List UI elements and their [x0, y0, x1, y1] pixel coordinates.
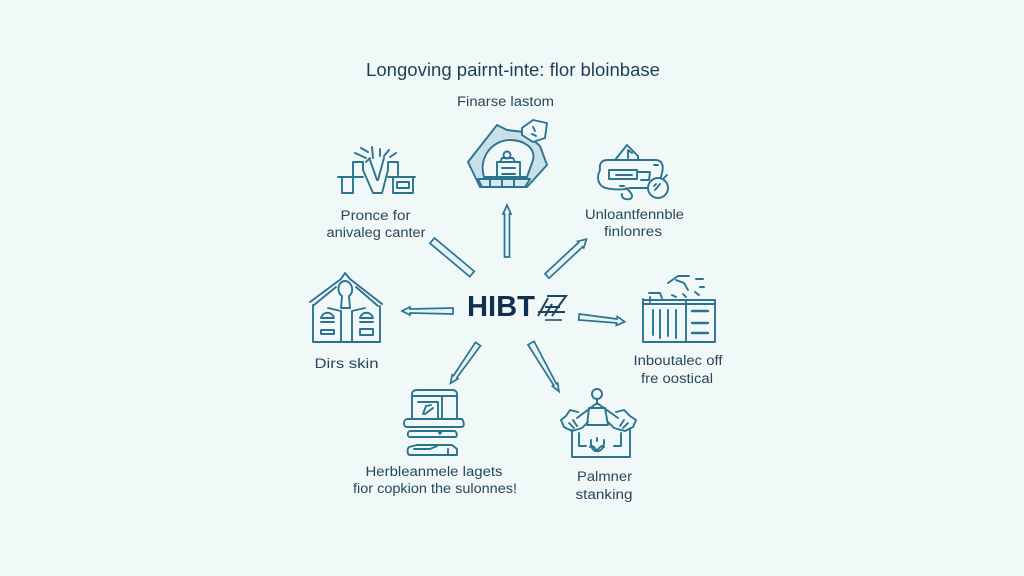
label: Unloantfennble finlonres [585, 207, 684, 239]
arrow: to lower right [528, 341, 562, 393]
node: Finarse lastom [457, 94, 554, 187]
label: Inboutalec off fre oostical: Inboutalec off [634, 353, 723, 368]
icon: laptop and books [404, 390, 464, 455]
label: Pronce for anivaleg canter [326, 208, 426, 240]
label: Herbleanmele lagets for copkion the sulonnes!: fior copkion the sulonnes! [353, 481, 517, 496]
node: Palmner stanking [561, 389, 636, 502]
label: Dirs skin: Dirs skin [314, 356, 378, 371]
icon: device with stopwatch [598, 145, 668, 199]
arrow: up to Finarse lastom [503, 205, 511, 257]
arrow: to lower left [448, 342, 481, 385]
node: Unloantfennble finlonres [585, 145, 684, 239]
node: Pronce for anivaleg canter [326, 147, 426, 240]
icon: temple with trees [561, 389, 636, 457]
icon: tree with buildings [338, 147, 415, 193]
label: Inboutalec off fre oostical: fre oostical [641, 371, 713, 386]
label: Finarse lastom: Finarse lastom [457, 94, 554, 109]
node: Dirs skin [310, 273, 382, 371]
label: Herbleanmele lagets for copkion the sulonnes! [353, 464, 517, 496]
node: Inboutalec off fre oostical [634, 276, 723, 386]
node: Herbleanmele lagets for copkion the sulonnes! [353, 390, 517, 496]
label: Unloantfennble finlonres: Unloantfennble [585, 207, 684, 222]
label: Pronce for anivaleg canter: Pronce for [340, 208, 411, 223]
title: Longoving pairnt-inte: flor bloinbase [366, 60, 660, 80]
icon: finance building [468, 120, 547, 187]
icon: house with keyhole [310, 273, 382, 342]
arrow: to right [579, 313, 625, 326]
icon: document board with scattered marks [643, 276, 715, 342]
label: Herbleanmele lagets for copkion the sulonnes!: Herbleanmele lagets [366, 464, 503, 479]
arrow: to left [402, 307, 453, 315]
label: Inboutalec off fre oostical [634, 353, 723, 386]
label: Pronce for anivaleg canter: anivaleg canter [326, 225, 426, 240]
label: Palmner stanking [576, 469, 633, 502]
center logo: HIBT: HIBT [467, 291, 535, 323]
arrow: to upper left [430, 238, 474, 277]
label: Palmner stanking: stanking [576, 487, 632, 502]
arrow: to upper right [544, 236, 590, 279]
center logo: HIBT [467, 291, 566, 323]
label: Unloantfennble finlonres: finlonres [604, 224, 662, 239]
label: Palmner stanking: Palmner [577, 469, 633, 484]
